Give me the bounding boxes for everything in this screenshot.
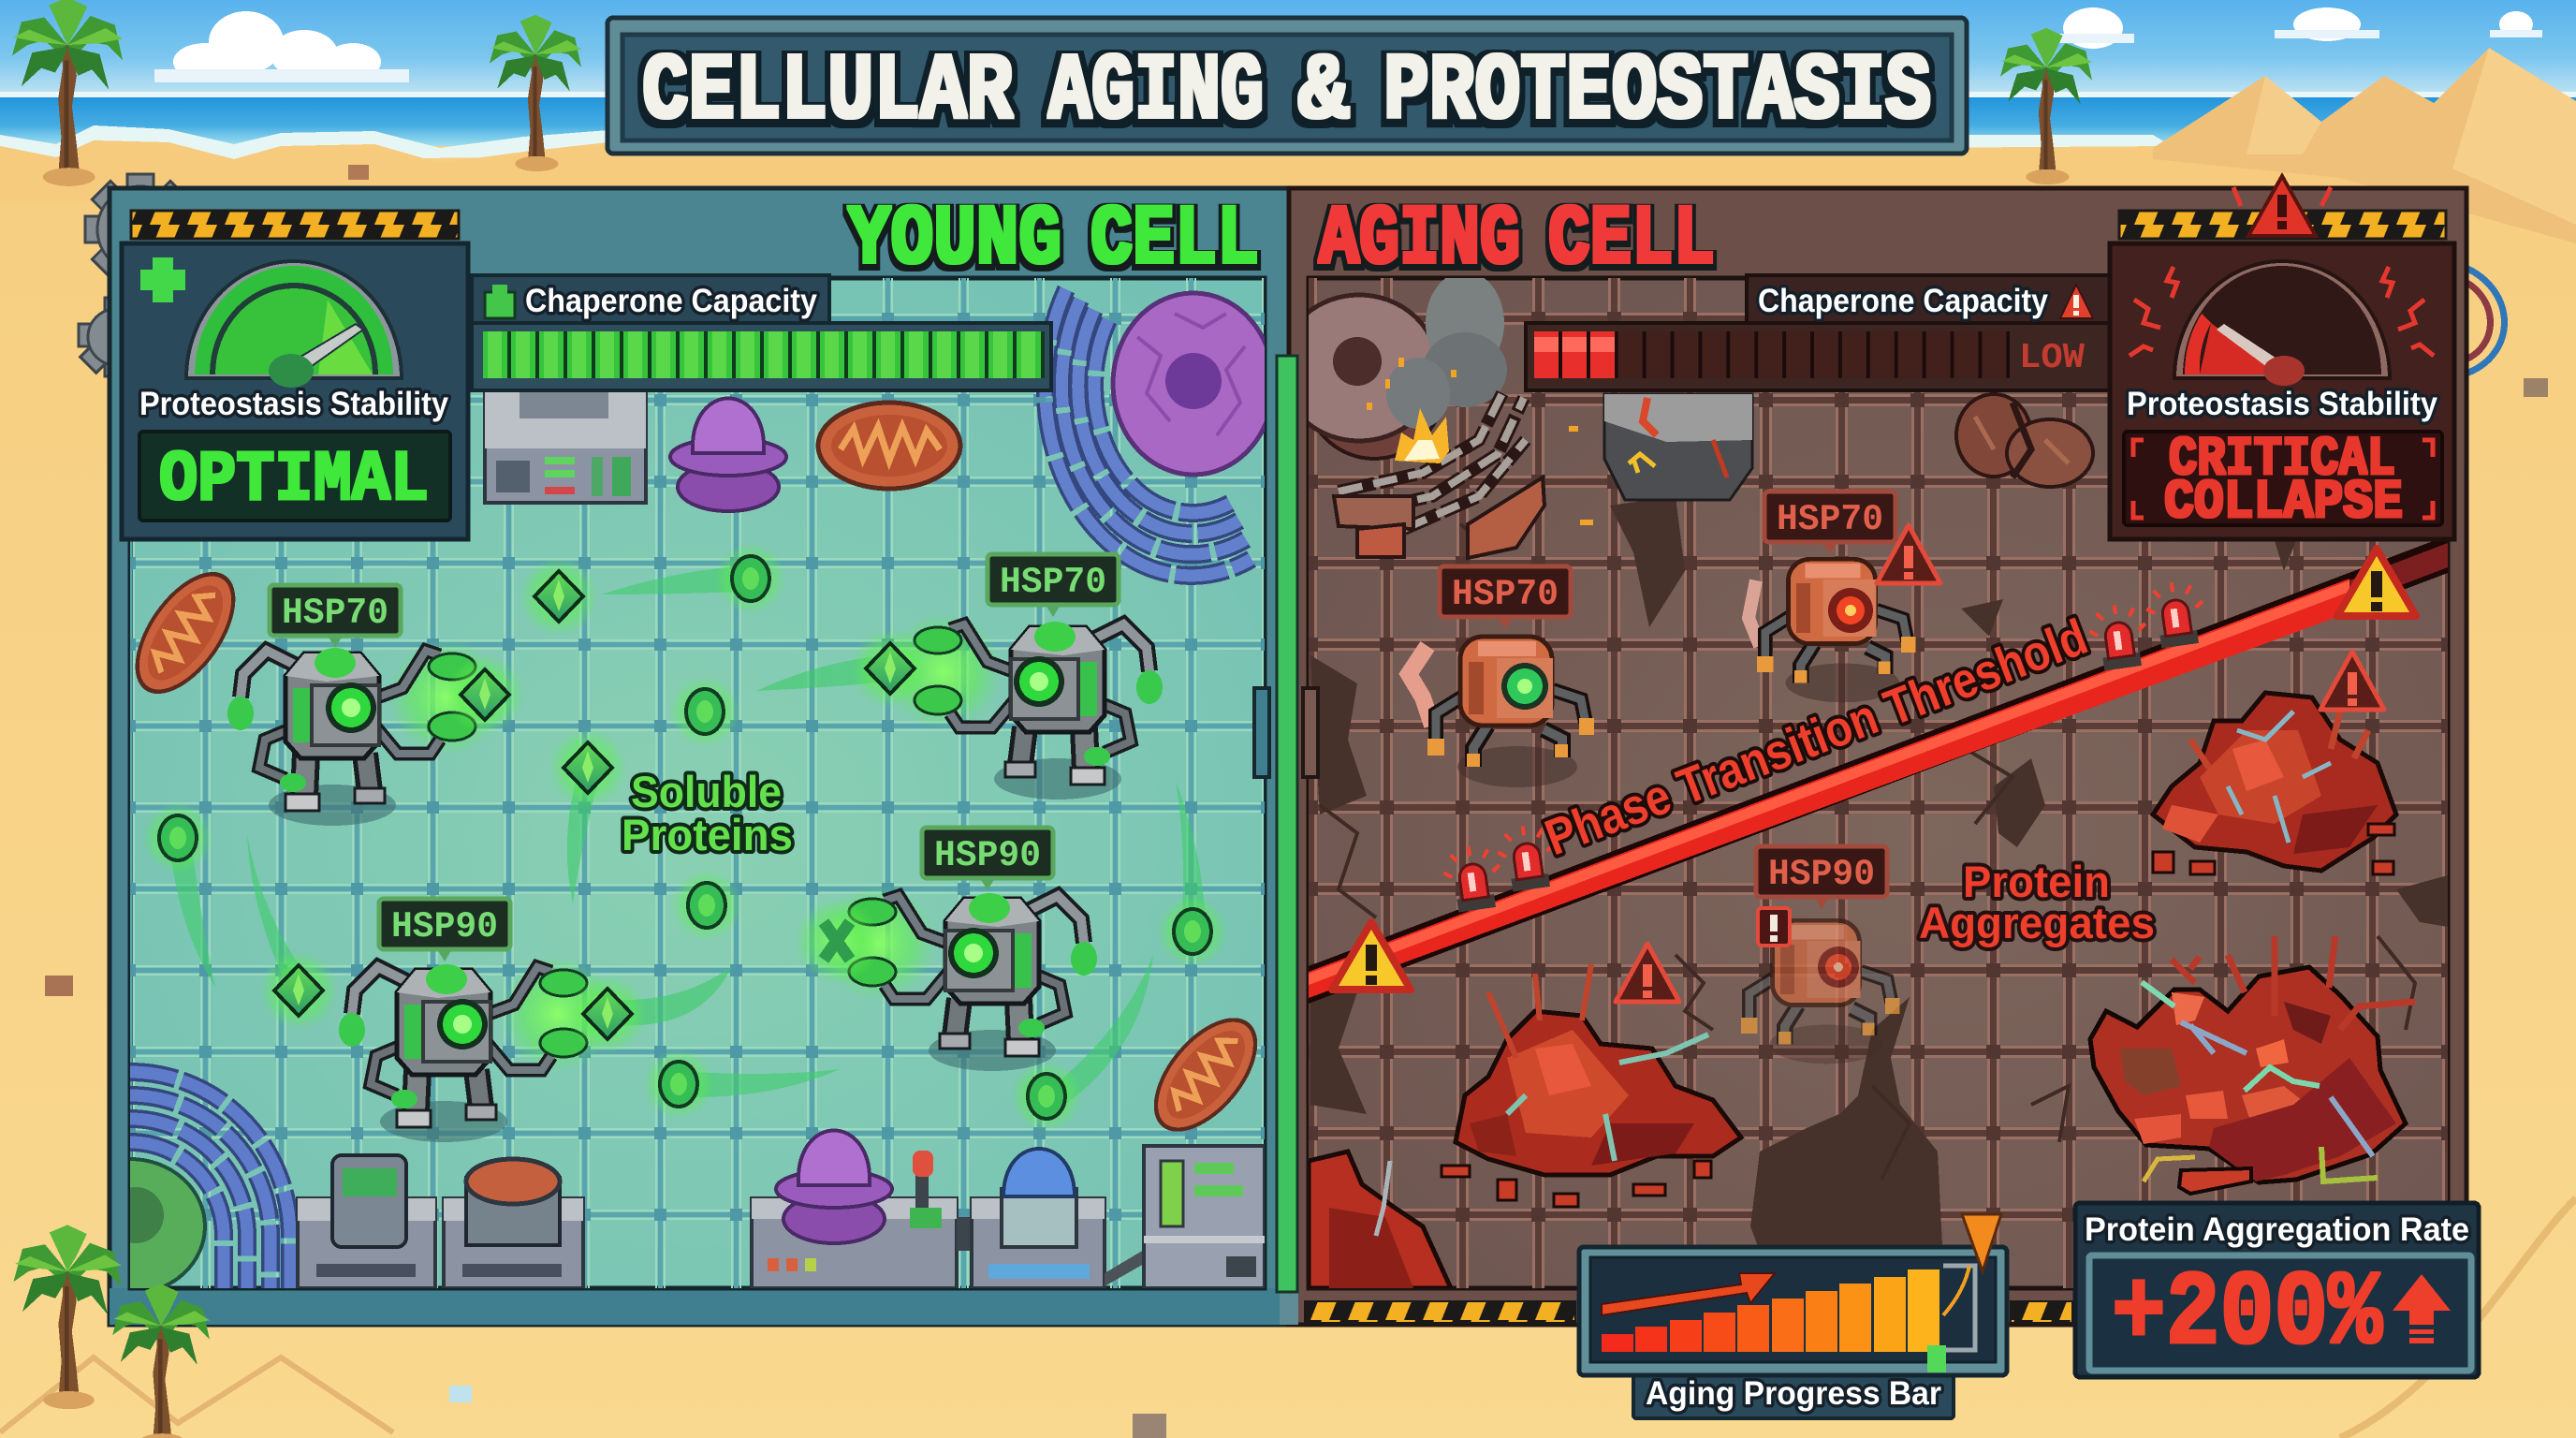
icon: plus bbox=[140, 257, 185, 302]
panel: chaperone capacity aging bbox=[1526, 275, 2110, 390]
warning icons on floor bbox=[1616, 525, 2384, 1002]
title banner bbox=[607, 18, 1967, 154]
robot: HSP90 left bbox=[339, 956, 616, 1142]
marker: orange pointer bbox=[1962, 1214, 2001, 1271]
arrow rising bbox=[1602, 1273, 1775, 1315]
label: soluble proteins: Proteins bbox=[622, 810, 793, 859]
thin cracks bbox=[1320, 524, 2415, 1180]
alert square bbox=[1758, 908, 1790, 946]
organelle: bottom-left nucleus bbox=[130, 1063, 296, 1288]
title banner: & bbox=[1298, 40, 1349, 146]
heading: aging cell: AGING bbox=[1319, 193, 1520, 288]
organelle: burnt machine bbox=[1604, 394, 1752, 500]
main frame bbox=[110, 188, 2466, 1325]
gauge: optimal bbox=[186, 261, 402, 388]
proteins: diamonds bbox=[259, 557, 929, 1053]
label: HSP90 damaged bbox=[1756, 846, 1887, 909]
panel: protein aggregation rate bbox=[2075, 1203, 2479, 1377]
label: HSP70 left bbox=[270, 585, 401, 648]
panel: chaperone capacity young: Chaperone Capacity bbox=[525, 283, 817, 319]
status: optimal: OPTIMAL bbox=[159, 440, 429, 521]
icon: warning bbox=[2060, 285, 2093, 318]
label: protein aggregates: Protein bbox=[1963, 857, 2110, 906]
organelle: nucleus and endoplasmic reticulum bbox=[1046, 289, 1274, 576]
icon: chaperone bbox=[485, 285, 515, 318]
robot: fading HSP90 bbox=[1741, 920, 1899, 1064]
organelle: mitochondrion top bbox=[818, 403, 960, 489]
status: critical collapse: COLLAPSE bbox=[2164, 473, 2403, 534]
palm tree: top right bbox=[2000, 28, 2092, 184]
aggregate: lower right bbox=[2090, 936, 2415, 1194]
label: soluble proteins bbox=[622, 767, 793, 859]
heading: young cell: CELL bbox=[1090, 193, 1259, 288]
panel: protein aggregation rate: +200% bbox=[2112, 1255, 2383, 1374]
label: protein aggregates: Aggregates bbox=[1919, 898, 2155, 947]
icon: electric sparks bbox=[2130, 267, 2434, 356]
title banner: AGING bbox=[1048, 40, 1264, 146]
icon: red warning beacon bbox=[2233, 176, 2331, 236]
panel: aging cell bbox=[1281, 271, 2448, 1288]
label: HSP70 right: HSP70 bbox=[1000, 562, 1106, 603]
heading: aging cell bbox=[1319, 193, 1715, 288]
label: protein aggregates bbox=[1919, 857, 2155, 947]
robot: HSP70 right bbox=[886, 613, 1163, 800]
robot: HSP70 left bbox=[227, 639, 505, 826]
title banner: CELLULAR bbox=[642, 40, 1013, 146]
icon: up arrow bbox=[2393, 1274, 2451, 1343]
title banner: PROTEOSTASIS bbox=[1383, 40, 1931, 146]
robot: damaged HSP70 centre bbox=[1749, 559, 1915, 702]
label: HSP70 damaged left bbox=[1440, 566, 1571, 629]
marker: green slider bbox=[1927, 1345, 1946, 1372]
panel: proteostasis stability young: Proteostasis Stability bbox=[139, 386, 448, 422]
label: HSP70 damaged centre bbox=[1764, 492, 1895, 554]
label: HSP90 damaged: HSP90 bbox=[1768, 854, 1875, 895]
panel: proteostasis stability aging: Proteostasis Stability bbox=[2127, 386, 2437, 422]
warning signs on threshold bbox=[1332, 549, 2416, 990]
label: HSP70 right bbox=[988, 554, 1119, 617]
label: HSP90 left: HSP90 bbox=[391, 906, 498, 947]
heading: young cell bbox=[848, 193, 1259, 288]
organelle: mitochondrion right bbox=[1154, 1019, 1257, 1131]
robot: HSP90 right bbox=[820, 885, 1097, 1071]
organelle: mitochondrion left bbox=[135, 572, 236, 694]
palm tree: bottom left back bbox=[13, 1225, 122, 1409]
cables right bbox=[2464, 267, 2505, 374]
panel: proteostasis stability aging bbox=[2110, 176, 2454, 539]
organelle: golgi bbox=[670, 399, 786, 511]
label: HSP70 left: HSP70 bbox=[282, 593, 388, 634]
palm tree: bottom left front bbox=[112, 1284, 210, 1438]
palm tree: top centre-left bbox=[490, 15, 581, 171]
panel: protein aggregation rate: Protein Aggregation Rate bbox=[2085, 1211, 2469, 1248]
palm tree: top left bbox=[12, 0, 123, 186]
cracks in floor bbox=[1310, 496, 2448, 1288]
divider: green progress bar bbox=[1254, 356, 1318, 1292]
protein motion trails bbox=[168, 566, 1206, 1103]
panel: chaperone capacity aging: Chaperone Capacity bbox=[1758, 283, 2048, 319]
panel: aging progress bar: Aging Progress Bar bbox=[1646, 1375, 1941, 1412]
panel: chaperone capacity young bbox=[472, 275, 1051, 390]
organelle: damaged nucleus with smoke and fire bbox=[1309, 278, 1593, 560]
organelle: broken mitochondrion bbox=[1956, 394, 2093, 487]
label: HSP70 damaged left: HSP70 bbox=[1452, 574, 1559, 615]
gears bbox=[79, 174, 196, 376]
label: HSP90 right: HSP90 bbox=[934, 835, 1041, 876]
phase transition threshold line bbox=[1309, 536, 2448, 1004]
sirens bbox=[1441, 579, 2208, 914]
panel: young cell bbox=[55, 278, 1274, 1294]
aggregate: lower left bbox=[1442, 964, 1741, 1207]
status: critical collapse: CRITICAL bbox=[2169, 430, 2395, 491]
aggregate: bottom corner bbox=[1309, 1152, 1451, 1288]
panel: aging progress bar bbox=[1579, 1214, 2007, 1418]
panel: proteostasis stability young bbox=[122, 211, 468, 539]
label: HSP90 left bbox=[379, 899, 510, 961]
protein: held by robot bbox=[798, 901, 876, 981]
machine: bottom row bbox=[298, 1131, 1265, 1288]
proteins: round bbox=[142, 543, 1228, 1132]
robot: damaged HSP70 left bbox=[1409, 637, 1594, 787]
hazard strips bottom bbox=[1305, 1301, 2072, 1323]
organelle: machine top bbox=[485, 390, 646, 503]
label: HSP90 right bbox=[922, 828, 1053, 890]
heading: aging cell: CELL bbox=[1548, 193, 1715, 288]
panel: chaperone capacity aging: LOW bbox=[2019, 338, 2085, 378]
aggregate: upper right bbox=[2153, 693, 2396, 874]
label: soluble proteins: Soluble bbox=[631, 767, 782, 816]
heading: young cell: YOUNG bbox=[848, 193, 1061, 288]
status: critical collapse bbox=[2124, 430, 2442, 534]
label: phase transition threshold: Phase Transition Threshold bbox=[1538, 609, 2095, 866]
label: HSP70 damaged centre: HSP70 bbox=[1777, 499, 1883, 540]
bars rising bbox=[1602, 1269, 1939, 1352]
gauge: critical bbox=[2174, 261, 2390, 386]
